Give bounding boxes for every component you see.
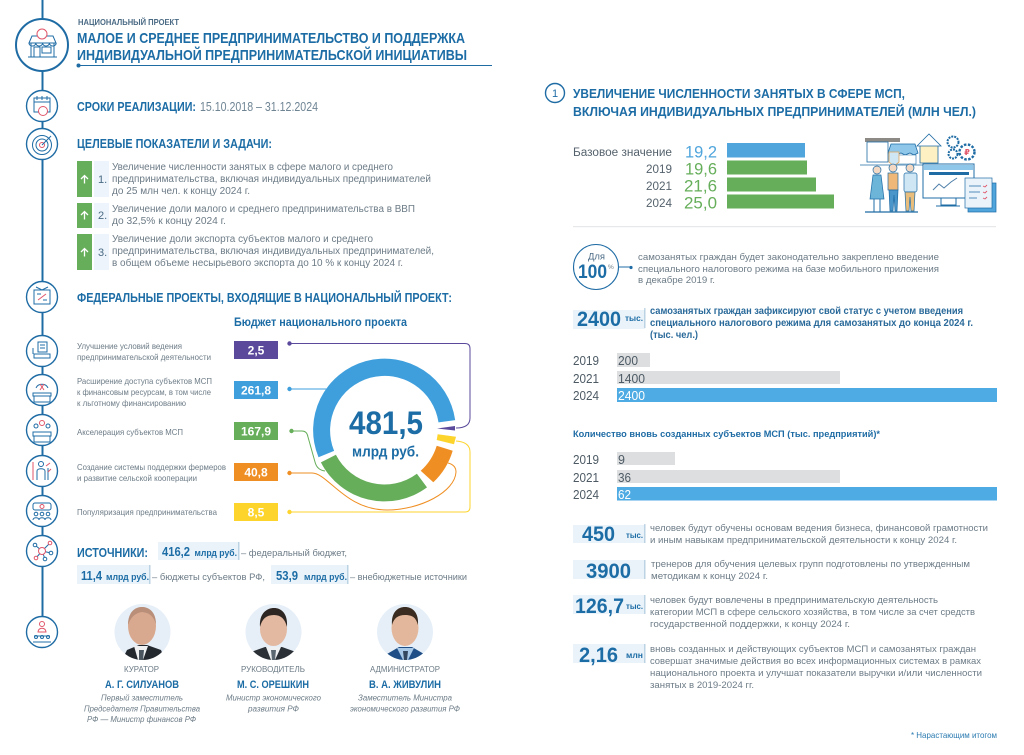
project label 4 (77, 463, 226, 483)
target 1: до 25 млн чел. к концу 2024 г. (112, 186, 250, 197)
callout: 100% self-employed: специального налогового режима на базе мобильного приложения (638, 264, 939, 275)
icon: shop (16, 19, 68, 71)
stat: 2,16 million: национального проекта и улучшат показатели выручки и/или численности (650, 668, 982, 679)
stat: 2,16 million (573, 644, 982, 691)
administrator: экономического развития РФ (350, 704, 460, 714)
callout: 2400 thousand: тыс. (625, 314, 643, 323)
bar chart: new SMEs: 62 (618, 488, 631, 502)
portrait: curator (114, 604, 171, 660)
icon: federal projects board (26, 282, 58, 312)
project label 3: Акселерация субъектов МСП (77, 428, 183, 437)
bar chart: employment: 2024 (646, 196, 672, 210)
head of project (226, 604, 321, 714)
stat: 3900: тренеров для обучения целевых групп подготовлены по утвержденным (651, 559, 970, 570)
target 1: Увеличение численности занятых в сфере малого и среднего (112, 162, 393, 173)
project label 5: Популяризация предпринимательства (77, 508, 217, 517)
illustration: small business (860, 134, 996, 212)
stat: 126,7 thousand: категории МСП в сфере сельского хозяйства, в том числе за счет средств (650, 607, 975, 618)
callout: 2400 thousand: самозанятых граждан зафиксируют свой статус с учетом введения (650, 306, 963, 317)
bar chart: self-employed: 2400 (618, 389, 645, 403)
target 3: Увеличение доли экспорта субъектов малого и среднего (112, 234, 373, 245)
callout: 100% self-employed: 100 (578, 262, 607, 283)
people (873, 166, 881, 174)
icon: sources network (26, 536, 58, 566)
source: regional budgets: – бюджеты субъектов РФ, (152, 572, 265, 583)
stat: 2,16 million: 2,16 (579, 644, 618, 667)
callout: 2400 thousand (573, 306, 973, 341)
curator: Первый заместитель (101, 692, 183, 702)
stat: 3900: 3900 (586, 560, 631, 583)
documents (968, 183, 996, 212)
heading: federal projects: ФЕДЕРАЛЬНЫЕ ПРОЕКТЫ, ВХОДЯЩИЕ В НАЦИОНАЛЬНЫЙ ПРОЕКТ: (77, 290, 452, 305)
budget value 261,8 (234, 381, 278, 399)
callout: 100% self-employed: самозанятых граждан будет законодательно закреплено введение (638, 252, 939, 263)
stat: 2,16 million: занятых в 2019-2024 гг. (650, 680, 754, 691)
project label 4: и развитие сельской кооперации (77, 474, 197, 483)
project label 1: предпринимательской деятельности (77, 353, 211, 362)
gears (948, 136, 958, 148)
implementation period (77, 99, 318, 114)
curator: А. Г. СИЛУАНОВ (105, 679, 179, 691)
bar chart: employment: 19,6 (685, 160, 717, 178)
stat: 3900 (573, 559, 970, 583)
header: national project title (76, 16, 492, 68)
budget value 40,8: 40,8 (244, 466, 268, 480)
portrait: administrator (377, 604, 434, 660)
budget value 2,5: 2,5 (248, 344, 265, 358)
head of project: развития РФ (247, 704, 299, 714)
heading: employment (573, 86, 976, 119)
bar chart: employment: 21,6 (684, 176, 717, 196)
project label 4: Создание системы поддержки фермеров (77, 463, 226, 472)
icon: popularization (26, 496, 58, 526)
stat: 450 thousand: тыс. (626, 531, 643, 540)
project label 2 (77, 377, 212, 408)
stat: 2,16 million: млн (626, 651, 643, 660)
head of project: РУКОВОДИТЕЛЬ (241, 664, 305, 674)
icon: calendar (26, 90, 58, 122)
heading: budget: Бюджет национального проекта (234, 315, 407, 329)
building (865, 138, 900, 142)
callout: 100% self-employed: Для (588, 252, 605, 262)
target 3: в общем объеме несырьевого экспорта до 10 % к концу 2024 г. (112, 258, 403, 269)
curator: Председателя Правительства (84, 704, 200, 714)
target 3: предпринимательства, включая индивидуальных предпринимателей, (112, 246, 434, 257)
target 2: до 32,5% к концу 2024 г. (112, 216, 226, 227)
heading: employment: УВЕЛИЧЕНИЕ ЧИСЛЕННОСТИ ЗАНЯТЫХ В СФЕРЕ МСП, (573, 86, 905, 101)
bar chart: new SMEs: 9 (618, 453, 625, 467)
icon: target (26, 128, 58, 160)
project label 2: к льготному финансированию (77, 399, 186, 408)
icon: financial resources (26, 374, 58, 406)
project label 2: Расширение доступа субъектов МСП (77, 377, 212, 386)
connector: yellow (288, 441, 470, 514)
timeline line (42, 0, 44, 620)
donut total: млрд руб. (352, 444, 419, 460)
icon: farmer (26, 456, 58, 486)
project label 2: к финансовым ресурсам, в том числе (77, 388, 211, 397)
bar chart: self-employed: 2024 (573, 389, 599, 403)
curator (84, 604, 200, 724)
icon: hierarchy (26, 616, 58, 648)
connector: green (290, 429, 325, 471)
donut total (349, 405, 423, 460)
project label 1: Улучшение условий ведения (77, 342, 182, 351)
bar chart: new SMEs: 2024 (573, 488, 599, 502)
budget value 8,5 (234, 503, 278, 521)
bar chart: new SMEs (573, 452, 997, 502)
source: extra-budgetary: – внебюджетные источники (350, 572, 467, 583)
stat: 450 thousand: 450 (582, 523, 615, 546)
head of project: М. С. ОРЕШКИН (237, 679, 309, 691)
sources: ИСТОЧНИКИ: (77, 545, 148, 560)
footnote: * Нарастающим итогом (911, 731, 997, 740)
header: national project title: ИНДИВИДУАЛЬНОЙ ПРЕДПРИНИМАТЕЛЬСКОЙ ИНИЦИАТИВЫ (77, 46, 467, 64)
bar chart: new SMEs: 2021 (573, 471, 599, 485)
callout: 2400 thousand: специального налогового режима для самозанятых до конца 2024 г. (650, 318, 973, 329)
bar chart: self-employed (573, 353, 997, 403)
budget value 40,8 (234, 463, 278, 481)
administrator (350, 604, 460, 714)
stat: 126,7 thousand: тыс. (626, 602, 643, 611)
house (920, 145, 938, 163)
curator: КУРАТОР (124, 664, 159, 674)
heading: targets: ЦЕЛЕВЫЕ ПОКАЗАТЕЛИ И ЗАДАЧИ: (77, 136, 272, 151)
target 1: 1. (98, 174, 107, 186)
icon: acceleration (26, 414, 58, 446)
callout: 2400 thousand: (тыс. чел.) (650, 330, 698, 341)
curator: РФ — Министр финансов РФ (87, 714, 196, 724)
bar chart: employment: 25,0 (684, 194, 717, 212)
bar chart: employment: Базовое значение (573, 147, 672, 159)
source: regional budgets (77, 565, 265, 584)
segment: purple (437, 426, 455, 430)
header: national project title: МАЛОЕ И СРЕДНЕЕ ПРЕДПРИНИМАТЕЛЬСТВО И ПОДДЕРЖКА (77, 30, 465, 47)
segment: yellow (437, 434, 456, 444)
implementation period: СРОКИ РЕАЛИЗАЦИИ: (77, 99, 196, 114)
bar chart: employment (573, 142, 834, 212)
target 3 (77, 234, 434, 270)
header: national project title: НАЦИОНАЛЬНЫЙ ПРОЕКТ (78, 16, 180, 27)
bar chart: self-employed: 2021 (573, 372, 599, 386)
stat: 126,7 thousand: 126,7 (575, 595, 624, 618)
portrait: head (245, 604, 302, 660)
source: federal budget (158, 542, 347, 560)
bar chart: self-employed: 1400 (618, 372, 645, 386)
connector: blue (288, 387, 327, 391)
bar chart: self-employed: 2019 (573, 354, 599, 368)
target 3: 3. (98, 247, 107, 259)
source: regional budgets: 11,4 (81, 568, 103, 583)
budget value 8,5: 8,5 (248, 506, 265, 520)
stat: 3900: методикам к концу 2024 г. (651, 571, 768, 582)
source: federal budget: – федеральный бюджет, (241, 548, 347, 559)
stat: 450 thousand: человек будут обучены основам ведения бизнеса, финансовой грамотности (650, 523, 988, 534)
budget value 167,9: 167,9 (241, 424, 271, 438)
bar chart: self-employed: 200 (618, 354, 638, 368)
section number: 1 (552, 88, 558, 100)
connector: orange (288, 463, 456, 510)
implementation period: 15.10.2018 – 31.12.2024 (200, 99, 318, 114)
target 1: предпринимательства, включая индивидуальных предпринимателей (112, 174, 431, 185)
stat: 126,7 thousand: государственной поддержки, к концу 2024 г. (650, 619, 850, 630)
heading: new SMEs: Количество вновь созданных субъектов МСП (тыс. предприятий)* (573, 429, 880, 440)
administrator: АДМИНИСТРАТОР (370, 664, 440, 674)
source: extra-budgetary: 53,9 (276, 568, 298, 583)
target 1 (77, 161, 431, 197)
source: federal budget: 416,2 (162, 544, 190, 559)
monitor (923, 164, 974, 198)
head of project: Министр экономического (226, 692, 321, 702)
bar chart: employment: 19,2 (685, 142, 717, 162)
stat: 2,16 million: совершат значимые действия во всех информационных системах в рамках (650, 656, 981, 667)
administrator: Заместитель Министра (358, 692, 452, 702)
section number (546, 84, 564, 102)
source: extra-budgetary: млрд руб. (304, 572, 347, 582)
project label 1 (77, 342, 211, 362)
stat: 450 thousand: и иным навыкам предпринимательской деятельности к концу 2024 г. (650, 535, 957, 546)
callout: 100% self-employed: % (608, 264, 614, 271)
stat: 126,7 thousand (573, 595, 975, 630)
connector: purple (288, 342, 470, 428)
callout: 100% self-employed: в декабре 2019 г. (638, 275, 715, 286)
bar chart: employment: 2019 (646, 162, 672, 176)
illustration: small business: ₽ (964, 148, 970, 157)
stat: 450 thousand (573, 523, 988, 546)
source: extra-budgetary (271, 565, 467, 584)
bar chart: employment: 2021 (646, 179, 672, 193)
segment: blue (313, 359, 455, 457)
budget value 167,9 (234, 422, 278, 440)
bar chart: new SMEs: 36 (618, 471, 631, 485)
callout: 2400 thousand: 2400 (577, 308, 621, 331)
administrator: В. А. ЖИВУЛИН (369, 679, 441, 691)
bar chart: new SMEs: 2019 (573, 453, 599, 467)
heading: employment: ВКЛЮЧАЯ ИНДИВИДУАЛЬНЫХ ПРЕДПРИНИМАТЕЛЕЙ (МЛН ЧЕЛ.) (573, 104, 976, 119)
stat: 126,7 thousand: человек будут вовлечены в предпринимательскую деятельность (650, 595, 938, 606)
segment: orange (421, 446, 453, 482)
stat: 2,16 million: вновь созданных и действующих субъектов МСП и самозанятых граждан (650, 644, 976, 655)
source: regional budgets: млрд руб. (106, 572, 149, 582)
target 2: Увеличение доли малого и среднего предпринимательства в ВВП (112, 204, 415, 215)
icon: business conditions (26, 336, 58, 366)
sources (77, 542, 467, 584)
target 2: 2. (98, 210, 107, 222)
donut chart: budget (288, 342, 470, 514)
target 2 (77, 203, 415, 228)
shop awning (888, 144, 918, 155)
budget value 261,8: 261,8 (241, 384, 271, 398)
source: federal budget: млрд руб. (194, 548, 237, 558)
segment: green (321, 455, 427, 501)
donut total: 481,5 (349, 405, 423, 441)
callout: 100% self-employed (574, 244, 939, 290)
budget value 2,5 (234, 341, 278, 359)
